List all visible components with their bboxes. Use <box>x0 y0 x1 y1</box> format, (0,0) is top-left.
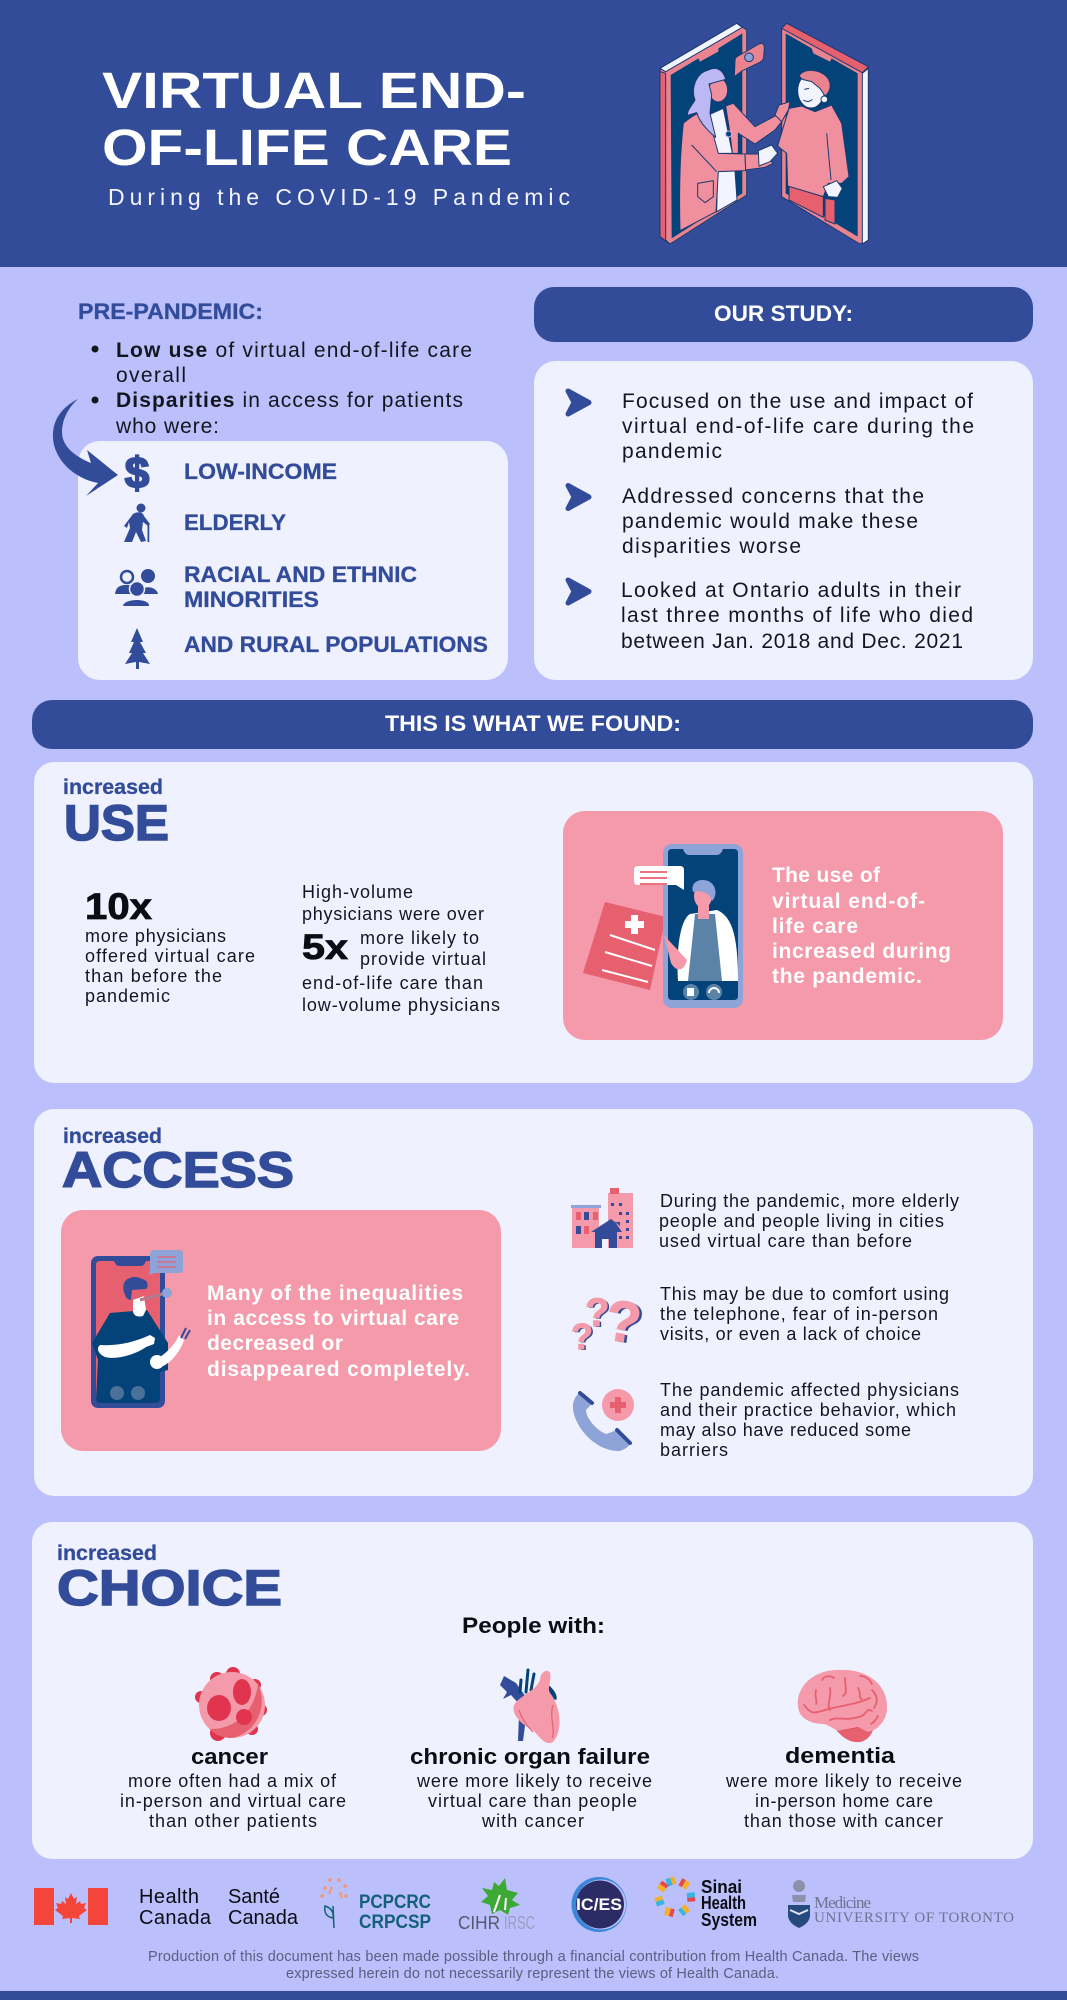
panel: increased access <box>34 1109 1033 1496</box>
text 1 <box>622 390 974 463</box>
callout text <box>207 1282 470 1381</box>
logo: Health Canada <box>139 1886 299 1929</box>
stat: 10x: more physicians <box>85 926 226 946</box>
callout text: Many of the inequalities <box>207 1282 463 1305</box>
description: dementia: were more likely to receive <box>725 1771 962 1791</box>
logo: Health Canada: Canada <box>139 1907 212 1929</box>
footer disclaimer <box>148 1949 919 1982</box>
card: disparity groups <box>78 441 508 680</box>
arrow to groups <box>53 399 118 496</box>
callout text: increased during <box>772 940 951 963</box>
panel: increased choice <box>32 1522 1033 1859</box>
text 2 <box>622 485 924 558</box>
footer bar <box>0 1991 1067 2000</box>
doctor figure <box>680 68 782 231</box>
column: dementia <box>725 1670 962 1831</box>
header banner <box>0 0 1067 267</box>
description: cancer: in-person and virtual care <box>120 1791 346 1811</box>
label: racial and ethnic minorities <box>184 562 417 612</box>
text: physician behaviour: barriers <box>660 1440 728 1460</box>
title: VIRTUAL END- <box>102 62 526 119</box>
text: physician behaviour: The pandemic affected physicians <box>660 1380 959 1400</box>
icon: dollar: $ <box>125 449 149 498</box>
footer disclaimer: Production of this document has been made possible through a financial contribution from Health Canada. The views <box>148 1949 919 1965</box>
panel: our study <box>534 287 1033 680</box>
logo: PCPCRC: CRPCSP <box>359 1912 431 1933</box>
label: dementia: dementia <box>785 1743 896 1768</box>
heart speech bubble <box>734 43 764 77</box>
logo: CIHR IRSC: IRSC <box>504 1913 535 1933</box>
text 3: between Jan. 2018 and Dec. 2021 <box>621 630 963 653</box>
bullet list: Disparities in access for patients <box>116 389 463 412</box>
panel: increased use <box>34 762 1033 1083</box>
logo: CIHR IRSC <box>458 1878 535 1933</box>
label: low-income: LOW-INCOME <box>184 459 337 484</box>
card: study points <box>534 361 1033 680</box>
logo row <box>34 1876 1014 1933</box>
footer disclaimer: expressed herein do not necessarily represent the views of Health Canada. <box>286 1966 779 1982</box>
stat: 5x: physicians were over <box>302 904 484 924</box>
text: possible reasons: the telephone, fear of in-person <box>660 1304 938 1324</box>
callout text: disappeared completely. <box>207 1358 470 1381</box>
callout text: in access to virtual care <box>207 1307 459 1330</box>
logo: CIHR IRSC: CIHR <box>458 1913 500 1933</box>
text: physician behaviour <box>660 1380 959 1460</box>
heading: increased access: increased <box>63 1125 162 1148</box>
icon: phone with medical cross <box>573 1389 634 1451</box>
callout text: The use of <box>772 864 881 887</box>
subheading: people with: People with: <box>462 1613 605 1638</box>
label: racial and ethnic minorities: MINORITIES <box>184 587 319 612</box>
heading: increased access <box>62 1125 294 1198</box>
stat: 5x: low-volume physicians <box>302 995 500 1015</box>
text 3 <box>621 579 973 653</box>
icon: question marks: ? <box>571 1316 593 1357</box>
icon: question marks: ? <box>585 1291 609 1335</box>
text: physician behaviour: and their practice behavior, which <box>660 1400 956 1420</box>
label: rural populations: AND RURAL POPULATIONS <box>184 632 488 657</box>
description: dementia: in-person home care <box>755 1791 933 1811</box>
icon: brain <box>798 1670 887 1742</box>
icon: tree <box>125 628 150 669</box>
logo: Health Canada: Health <box>139 1886 199 1908</box>
heading pill: our study: OUR STUDY: <box>714 301 853 326</box>
description: chronic organ failure <box>416 1771 652 1831</box>
logo: University of Toronto Medicine: UNIVERSITY OF TORONTO <box>814 1910 1014 1926</box>
logo: IC/ES: IC/ES <box>576 1895 622 1914</box>
label: racial and ethnic minorities: RACIAL AND ETHNIC <box>184 562 417 587</box>
subtitle: During the COVID-19 Pandemic <box>108 184 570 210</box>
icon: city buildings <box>571 1188 633 1248</box>
chevron 3 <box>568 580 589 603</box>
right phone <box>782 23 868 244</box>
stat: 10x: 10x <box>85 886 152 927</box>
callout text <box>772 864 951 988</box>
column: chronic organ failure <box>410 1670 652 1831</box>
heading: increased choice <box>57 1542 282 1616</box>
description: cancer <box>120 1771 346 1831</box>
icon: elderly person <box>124 504 150 542</box>
stat: 5x: High-volume <box>302 882 413 902</box>
text 3: Looked at Ontario adults in their <box>621 579 961 602</box>
bullet list: Low use of virtual end-of-life care <box>116 339 472 362</box>
stat: 10x: than before the <box>85 966 222 986</box>
text: elderly and city users: people and people living in cities <box>659 1211 944 1231</box>
logo: Health Canada: Canada <box>228 1907 299 1929</box>
description: chronic organ failure: virtual care than people <box>428 1791 637 1811</box>
icon: tumour cell <box>195 1667 267 1741</box>
text 1: Focused on the use and impact of <box>622 390 973 413</box>
text: physician behaviour: may also have reduced some <box>660 1420 911 1440</box>
stat: 5x <box>302 882 500 1015</box>
text: elderly and city users <box>659 1191 959 1251</box>
heading: pre-pandemic: PRE-PANDEMIC: <box>78 299 263 324</box>
heading: increased choice: CHOICE <box>57 1560 282 1616</box>
heading pill: our study <box>534 287 1033 342</box>
icon: diverse people <box>115 569 158 606</box>
title <box>102 62 526 176</box>
heading: increased use: USE <box>64 795 169 851</box>
text: possible reasons: visits, or even a lack of choice <box>660 1324 921 1344</box>
patient figure <box>758 70 849 224</box>
chevron 2 <box>568 486 589 508</box>
stat: 5x: 5x <box>302 928 349 967</box>
text 2: disparities worse <box>622 535 801 558</box>
icon: question marks: ? <box>604 1289 648 1358</box>
callout text: the pandemic. <box>772 965 922 988</box>
logo: PCPCRC <box>320 1878 431 1933</box>
heading: increased access: ACCESS <box>62 1142 294 1198</box>
description: dementia <box>725 1771 962 1831</box>
stat: 10x <box>85 886 255 1006</box>
stat: 10x: offered virtual care <box>85 946 255 966</box>
label: cancer: cancer <box>191 1744 268 1769</box>
logo: Sinai Health System <box>654 1876 757 1930</box>
column: cancer <box>120 1667 346 1831</box>
callout: use increased <box>563 811 1003 1040</box>
description: chronic organ failure: were more likely to receive <box>416 1771 652 1791</box>
heading: increased use: increased <box>63 776 163 799</box>
illustration: doctor and patient in phones <box>660 23 868 244</box>
text 2: Addressed concerns that the <box>622 485 924 508</box>
starburst mark <box>654 1876 695 1917</box>
icon: question marks: ? <box>573 1317 595 1358</box>
text 3: last three months of life who died <box>621 604 973 627</box>
chevron 1 <box>568 391 589 414</box>
description: cancer: than other patients <box>149 1811 317 1831</box>
callout text: virtual end-of- <box>772 890 925 913</box>
logo: Health Canada: Santé <box>228 1886 280 1908</box>
logo: PCPCRC: PCPCRC <box>359 1892 431 1913</box>
text 1: pandemic <box>622 440 722 463</box>
description: dementia: than those with cancer <box>744 1811 943 1831</box>
title: OF-LIFE CARE <box>102 119 512 176</box>
left phone <box>660 23 747 244</box>
icon: question marks: ? <box>601 1288 645 1357</box>
heading pill: this is what we found <box>32 700 1033 749</box>
label: elderly: ELDERLY <box>184 510 286 535</box>
logo: Canadian flag <box>34 1888 108 1925</box>
logo: University of Toronto Medicine: Medicine <box>814 1893 871 1912</box>
heading: increased choice: increased <box>57 1542 157 1565</box>
wordmark: Sinai <box>701 1877 742 1897</box>
text: possible reasons <box>660 1284 949 1344</box>
text 1: virtual end-of-life care during the <box>622 415 974 438</box>
bullet list: who were: <box>115 415 219 438</box>
stat: 5x: end-of-life care than <box>302 973 483 993</box>
callout text: decreased or <box>207 1332 343 1355</box>
bullet list <box>92 339 472 438</box>
text: elderly and city users: used virtual care than before <box>659 1231 912 1251</box>
callout text: life care <box>772 915 858 938</box>
description: chronic organ failure: with cancer <box>481 1811 584 1831</box>
stat: 10x: pandemic <box>85 986 170 1006</box>
wordmark: Health <box>701 1893 746 1913</box>
stat: 5x: provide virtual <box>360 949 486 969</box>
icon: question marks <box>571 1288 648 1358</box>
description: cancer: more often had a mix of <box>128 1771 337 1791</box>
icon: question marks: ? <box>587 1292 611 1336</box>
text 2: pandemic would make these <box>622 510 918 533</box>
logo: University of Toronto Medicine <box>788 1880 1014 1928</box>
heading pill: this is what we found: THIS IS WHAT WE FOUND: <box>385 711 681 736</box>
text: elderly and city users: During the pandemic, more elderly <box>660 1191 959 1211</box>
illustration: man on phone <box>91 1250 190 1408</box>
wordmark <box>701 1877 757 1930</box>
stat: 5x: more likely to <box>360 928 479 948</box>
bullet list: overall <box>116 364 186 387</box>
icon: heart <box>500 1670 560 1743</box>
panel: pre-pandemic <box>53 299 508 680</box>
logo: IC/ES <box>572 1877 626 1932</box>
label: chronic organ failure: chronic organ failure <box>410 1744 650 1769</box>
callout: inequalities decreased <box>61 1210 501 1451</box>
wordmark: System <box>701 1910 757 1930</box>
illustration: doctor on phone <box>583 844 743 1008</box>
text: possible reasons: This may be due to comfort using <box>660 1284 949 1304</box>
